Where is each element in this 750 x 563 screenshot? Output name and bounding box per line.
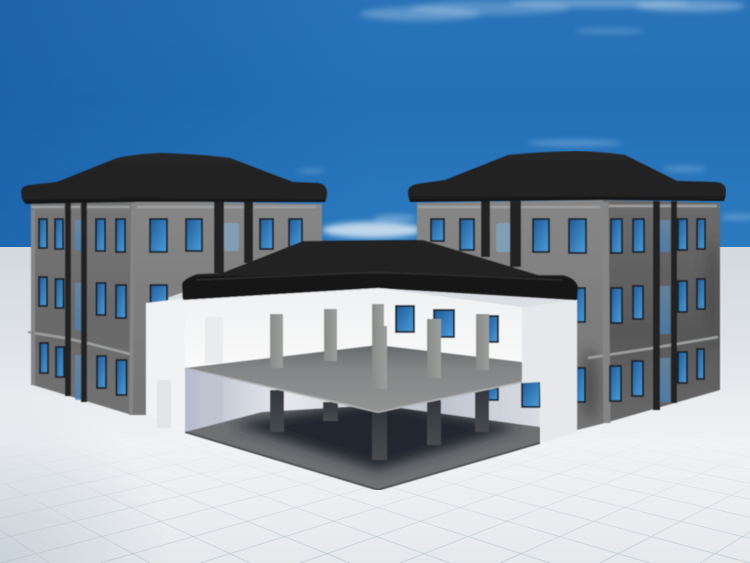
cutaway: slab front edge <box>185 368 522 412</box>
right building: hipped roof <box>408 151 726 202</box>
cutaway: upper door panel <box>205 317 223 363</box>
left building: windows <box>39 219 302 395</box>
left building: cornice and floor bands <box>28 203 316 415</box>
sky background <box>0 0 750 248</box>
cutaway: hipped roof <box>182 240 578 300</box>
right building <box>408 151 726 430</box>
central cutaway building <box>146 240 578 490</box>
left building: hipped roof <box>21 153 327 204</box>
cutaway: left white outer wall <box>146 298 190 433</box>
cutaway: upper floor slab <box>185 345 522 411</box>
cutaway: lower door panel <box>205 377 223 425</box>
cutaway: interior windows <box>396 306 540 407</box>
right building: dark downpipe columns <box>481 201 677 410</box>
cutaway: ground floor slab <box>185 405 540 490</box>
cutaway: dark shadow under slab <box>232 400 520 470</box>
right building: stained dark patches <box>580 240 719 420</box>
left building <box>21 153 327 415</box>
right building: cornice and floor bands <box>418 202 718 423</box>
cutaway: upper storey back walls <box>185 288 522 370</box>
left building: front wall <box>132 201 322 415</box>
right building: recessed glazing <box>496 220 670 402</box>
cutaway: lower storey back walls <box>185 345 540 432</box>
right building: front wall <box>417 200 605 430</box>
left building: side wall <box>31 201 146 415</box>
right building: side wall <box>603 200 720 423</box>
cutaway: upper storey columns <box>270 304 489 389</box>
cutaway: outer door panel <box>157 380 171 428</box>
left building: dark downpipe columns <box>65 201 253 402</box>
right building: windows <box>431 219 705 402</box>
left building: recessed glazing <box>75 220 239 400</box>
cutaway: ground storey columns <box>270 390 489 460</box>
cutaway: right white end wall <box>522 300 577 443</box>
cutaway: ground slab front edge <box>185 432 540 490</box>
tiled ground plane <box>0 247 750 563</box>
clouds <box>297 0 750 238</box>
